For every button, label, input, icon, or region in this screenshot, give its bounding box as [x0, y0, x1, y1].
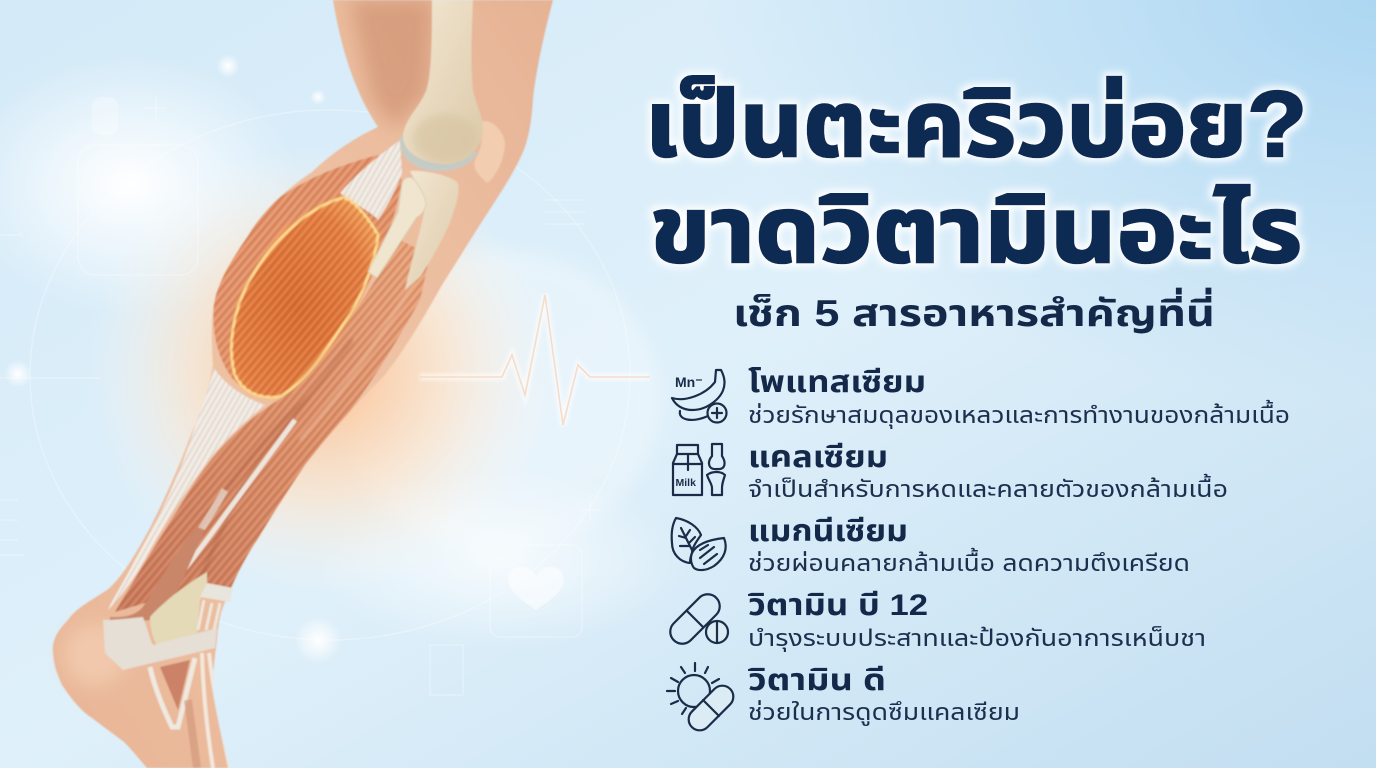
description: จำเป็นสำหรับการหดและคลายตัวของกล้ามเนื้อ [748, 473, 1228, 502]
heel shading [63, 623, 127, 687]
heading: แมกนีเซียม [748, 515, 908, 548]
upper calf muscle [214, 155, 402, 391]
ankle bone [150, 572, 207, 645]
decorative hud lines [0, 97, 630, 695]
retinaculum band [103, 617, 217, 670]
knee cartilage [400, 130, 478, 171]
leg skin [53, 0, 553, 768]
foot tendons [150, 653, 230, 768]
title [645, 72, 1307, 282]
patella [474, 121, 505, 183]
item: vitamin B12 [665, 589, 1206, 652]
tendons under band [198, 600, 220, 630]
icon: milk and bone: Milk [676, 477, 696, 489]
icon: milk and bone [673, 444, 725, 495]
icon: banana [672, 370, 726, 422]
achilles tendon [108, 368, 265, 610]
item: magnesium [672, 515, 1190, 576]
description: ช่วยในการดูดซึมแคลเซียม [748, 699, 1020, 727]
subtitle: เช็ก 5 สารอาหารสำคัญที่นี่ [733, 287, 1215, 334]
icon: banana: Mn⁻ [675, 374, 703, 390]
long tendon [147, 420, 295, 617]
muscle glow [232, 196, 378, 397]
ECG line [420, 295, 650, 425]
heading: วิตามิน ดี [747, 664, 886, 697]
deep ankle muscle [110, 527, 205, 625]
ankle band [200, 583, 233, 602]
description: ช่วยรักษาสมดุลของเหลวและการทำงานของกล้ามเนื้อ [748, 399, 1290, 429]
item: calcium [673, 441, 1228, 502]
tendon strip [153, 490, 225, 600]
icon: capsule and tablet [665, 589, 728, 649]
description: ช่วยผ่อนคลายกล้ามเนื้อ ลดความตึงเครียด [748, 547, 1190, 576]
thigh shading [350, 0, 432, 128]
title: เป็นตะคริวบ่อย? [645, 72, 1307, 176]
lower muscles [115, 240, 430, 612]
illustration: leg anatomy [53, 0, 553, 768]
item: vitamin D [667, 663, 1020, 735]
highlighted calf muscle [232, 198, 378, 397]
femur condyle shading [413, 114, 477, 162]
description: บำรุงระบบประสาทและป้องกันอาการเหน็บชา [748, 625, 1206, 652]
tibia [405, 171, 459, 290]
heading: วิตามิน บี 12 [747, 589, 928, 622]
knee tendon [340, 140, 402, 220]
femur [403, 0, 483, 164]
icon: sun and capsule [667, 663, 738, 735]
heading: แคลเซียม [748, 441, 888, 474]
heading: โพแทสเซียม [748, 366, 926, 399]
fibula [368, 177, 426, 278]
foot muscle [160, 660, 190, 710]
item: potassium [672, 366, 1290, 429]
title: ขาดวิตามินอะไร [650, 178, 1302, 282]
heart monitor icon [490, 545, 582, 637]
icon: leaf and almond [672, 518, 726, 570]
